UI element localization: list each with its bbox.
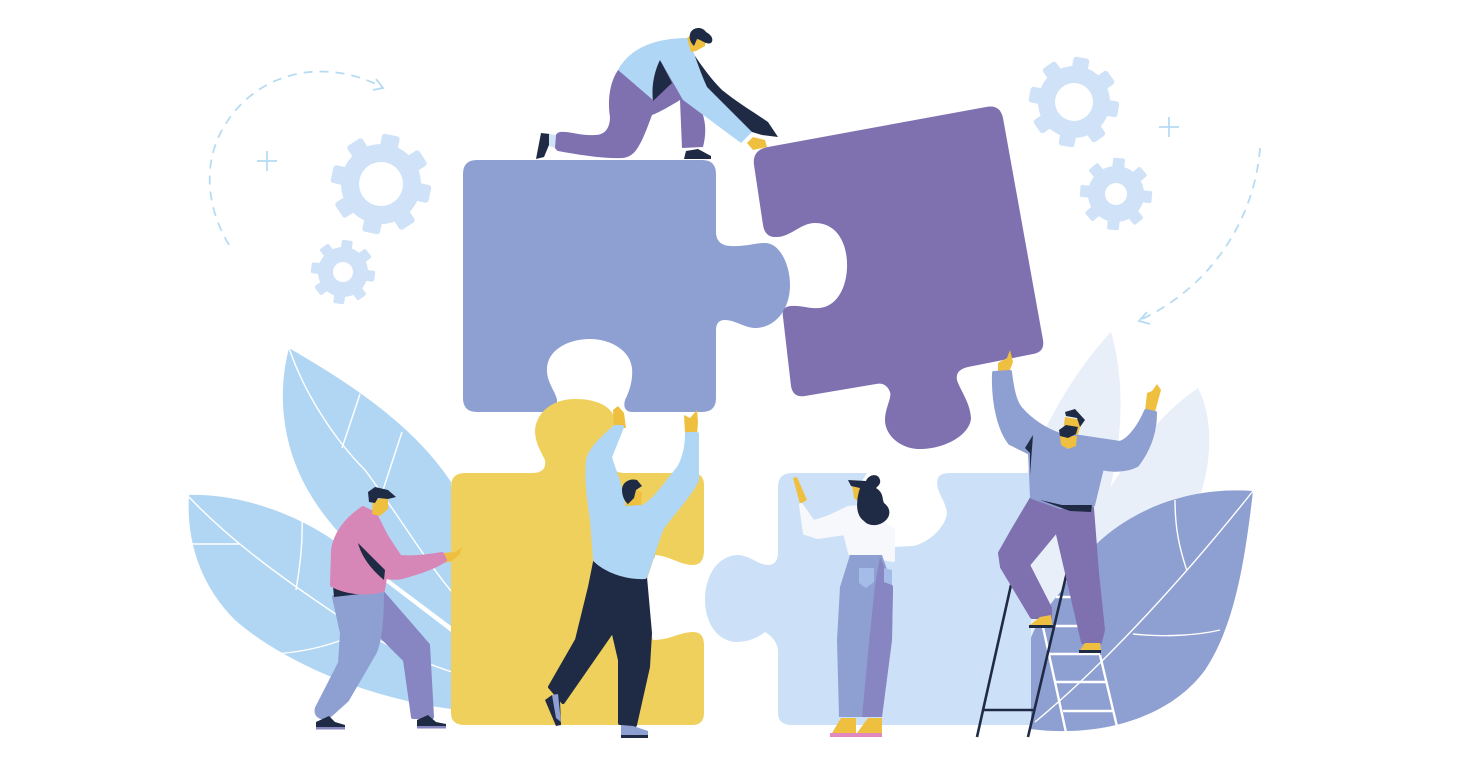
gear lower right xyxy=(1080,158,1152,230)
front leg xyxy=(317,592,382,718)
front shoe xyxy=(684,149,711,159)
shirt fold xyxy=(358,543,385,580)
hand xyxy=(443,547,462,563)
dark shirt side xyxy=(650,530,660,558)
raised hand xyxy=(793,477,807,504)
shirt xyxy=(801,505,893,560)
near trouser leg xyxy=(862,557,893,717)
gear top right xyxy=(1028,56,1120,148)
person: lifting in navy trousers xyxy=(545,406,698,738)
belt xyxy=(333,586,360,597)
dashed arrow: left arc xyxy=(210,72,383,245)
near hand xyxy=(747,137,767,150)
sweater xyxy=(994,372,1155,507)
sweater xyxy=(618,38,752,143)
face xyxy=(625,488,642,506)
dark shirt side xyxy=(652,60,672,101)
puzzle piece: yellow xyxy=(451,399,704,725)
person: woman in white xyxy=(793,475,893,737)
plus sign right xyxy=(1159,117,1179,137)
leaf: pale right xyxy=(1060,388,1209,640)
puzzle piece: periwinkle xyxy=(463,160,790,412)
far trouser leg xyxy=(837,555,893,717)
white rungs and legs xyxy=(1043,597,1119,737)
shoes xyxy=(832,718,882,733)
hair xyxy=(368,487,396,503)
hands xyxy=(998,350,1161,412)
back shoe xyxy=(536,133,550,159)
person: kneeling on top xyxy=(536,28,778,159)
ladder xyxy=(977,572,1119,737)
leaf: upper left xyxy=(283,348,452,626)
dashed arrow: right arc xyxy=(1139,148,1260,324)
face xyxy=(852,485,860,503)
shoe soles xyxy=(316,726,446,730)
belt xyxy=(1040,500,1092,512)
trousers xyxy=(550,562,650,725)
sweater xyxy=(332,508,445,592)
shoes xyxy=(1030,615,1101,650)
shoes xyxy=(316,715,446,729)
plus sign left xyxy=(257,151,277,171)
hands xyxy=(613,406,698,435)
neck xyxy=(1060,436,1077,449)
standing shoe sole xyxy=(621,735,648,738)
trousers xyxy=(1000,498,1103,642)
beard xyxy=(1059,425,1078,438)
puzzle piece: purple xyxy=(754,106,1043,449)
puzzle piece: light blue xyxy=(705,473,1031,725)
kicked shoe upper xyxy=(552,694,561,722)
hair and cap xyxy=(848,475,889,525)
hair xyxy=(690,28,712,46)
sock xyxy=(549,134,556,148)
neck and face xyxy=(687,33,706,52)
leaf: lower left xyxy=(189,495,452,709)
hair xyxy=(622,479,642,504)
person: bearded man on ladder xyxy=(994,350,1161,653)
trousers xyxy=(554,60,705,158)
black legs xyxy=(977,572,1067,737)
hair xyxy=(1065,409,1085,427)
person: pushing in pink xyxy=(316,487,462,730)
face xyxy=(1063,417,1082,435)
shoe soles xyxy=(830,733,882,737)
gear small left xyxy=(311,240,375,304)
sweater xyxy=(587,427,697,577)
leaf: pale back xyxy=(1025,332,1121,640)
leaf: dark blue right xyxy=(1030,490,1253,731)
kicked shoe xyxy=(545,695,561,726)
back leg xyxy=(378,592,432,717)
standing shoe xyxy=(621,725,648,735)
gear large left xyxy=(330,133,432,235)
shoe soles xyxy=(1029,625,1101,653)
pockets xyxy=(859,568,892,588)
face xyxy=(372,497,388,516)
dark shirt side xyxy=(1025,435,1033,475)
far arm xyxy=(693,53,778,137)
